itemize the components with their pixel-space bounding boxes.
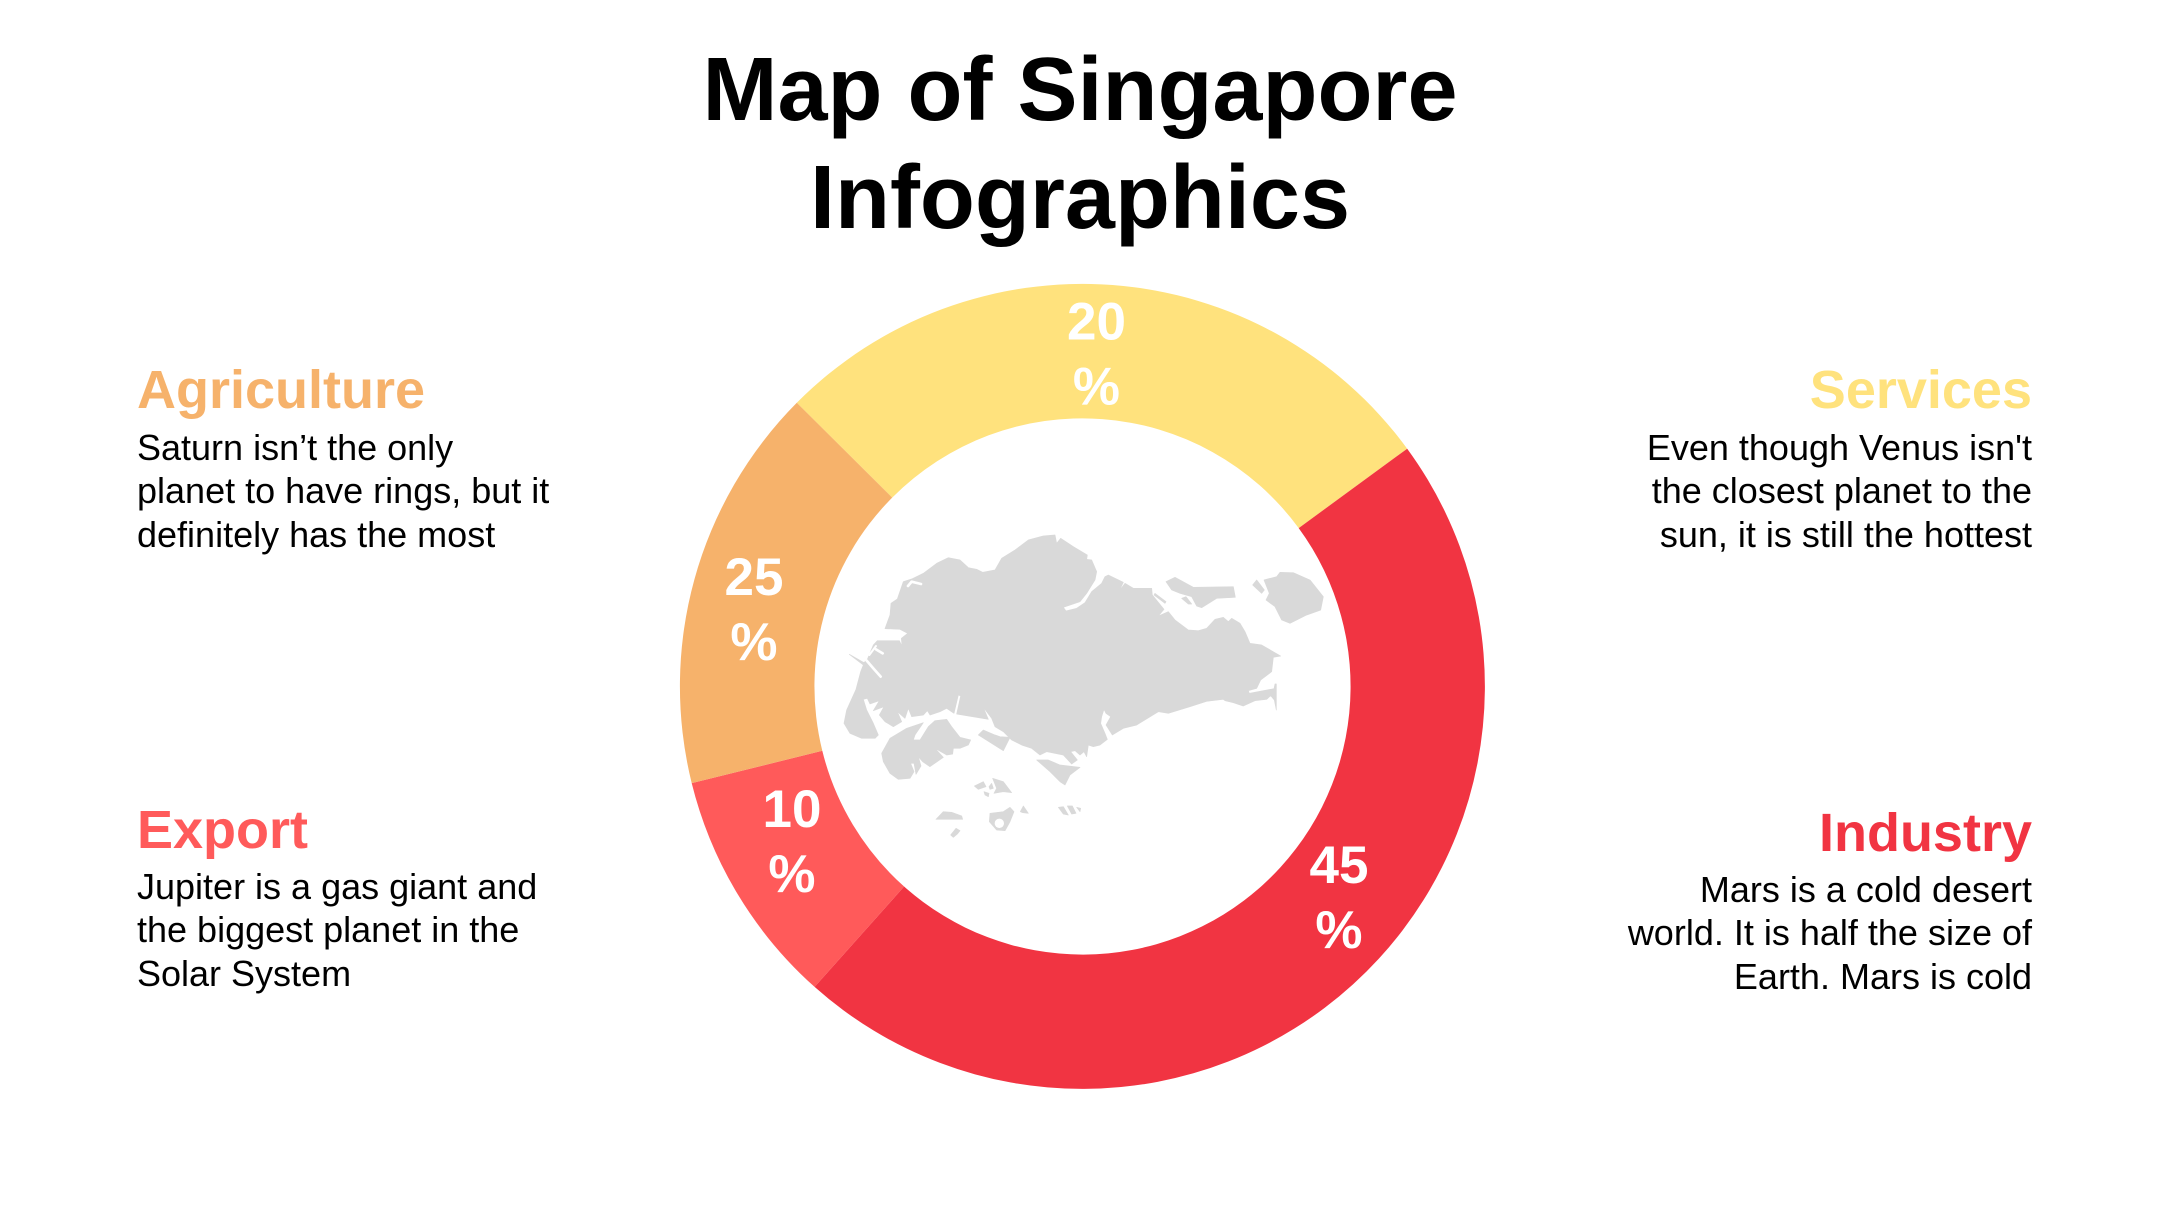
segment: industry 45%: % xyxy=(1315,901,1363,960)
segment: industry 45%: 45 xyxy=(1310,836,1368,895)
text: agriculture description xyxy=(137,427,549,555)
text: agriculture description: planet to have rings, but it xyxy=(137,470,549,511)
heading: agriculture: Agriculture xyxy=(137,360,425,420)
text: export description: the biggest planet in the xyxy=(137,909,519,950)
segment: agriculture 25%: 25 xyxy=(725,548,783,607)
segment: services 20% xyxy=(797,284,1407,528)
text: services description: the closest planet to the xyxy=(1652,470,2032,511)
segment: export 10%: 10 xyxy=(763,780,821,839)
text: agriculture description: definitely has the most xyxy=(137,514,495,555)
text: export description: Solar System xyxy=(137,953,351,994)
text: industry description: Mars is a cold desert xyxy=(1700,869,2032,910)
panel: export xyxy=(137,800,537,994)
segment: services 20%: % xyxy=(1073,358,1120,416)
text: industry description: world. It is half the size of xyxy=(1628,912,2032,953)
segment: services 20%: 20 xyxy=(1067,292,1126,352)
text: industry description xyxy=(1628,869,2032,997)
panel: industry xyxy=(1628,803,2032,997)
heading: export: Export xyxy=(137,800,308,860)
panel: services xyxy=(1647,360,2032,555)
heading: services: Services xyxy=(1810,360,2032,420)
text: services description xyxy=(1647,427,2032,555)
heading: industry: Industry xyxy=(1819,803,2032,863)
text: export description: Jupiter is a gas giant and xyxy=(137,866,537,907)
text: agriculture description: Saturn isn’t the only xyxy=(137,427,453,468)
segment: agriculture 25%: % xyxy=(730,613,778,672)
map of Singapore xyxy=(844,535,1323,837)
text: export description xyxy=(137,866,537,994)
segment: export 10% xyxy=(692,751,904,987)
text: industry description: Earth. Mars is cold xyxy=(1734,956,2032,997)
panel: agriculture xyxy=(137,360,549,555)
segment: agriculture 25% xyxy=(680,403,892,783)
segment: industry 45% xyxy=(815,449,1485,1089)
segment: export 10%: % xyxy=(768,845,816,904)
title: Map of Singapore xyxy=(702,40,1458,140)
donut chart xyxy=(680,284,1485,1089)
title: Infographics xyxy=(810,148,1350,248)
title xyxy=(702,40,1458,248)
text: services description: sun, it is still the hottest xyxy=(1660,514,2032,555)
text: services description: Even though Venus isn't xyxy=(1647,427,2032,468)
